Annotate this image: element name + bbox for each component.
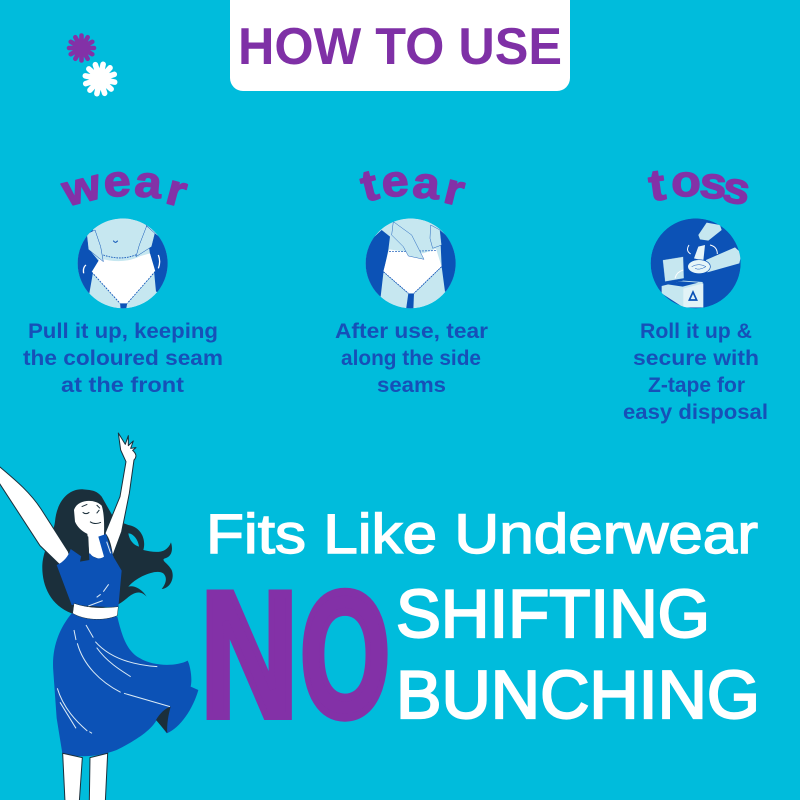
icon: tearing side seam — [366, 218, 456, 308]
text block: toss instructions: Roll it up & — [640, 320, 752, 343]
dress skirt — [53, 613, 198, 756]
face — [74, 501, 104, 537]
hair — [42, 489, 173, 613]
heading: wear — [56, 155, 192, 217]
headline: shifting: SHIFTING — [396, 576, 710, 652]
heading: toss: s — [719, 161, 754, 215]
text block: wear instructions: at the front — [61, 374, 184, 397]
heading: toss — [645, 156, 754, 215]
heading: wear: r — [161, 164, 192, 217]
neck and chest — [87, 533, 113, 560]
text block: tear instructions: After use, tear — [335, 320, 488, 343]
text block: wear instructions: the coloured seam — [23, 347, 223, 370]
icon: flowers — [69, 36, 118, 97]
headline: fits like underwear: Fits Like Underwear — [206, 502, 758, 565]
heading: tear: e — [380, 155, 410, 206]
panel: toss — [648, 170, 748, 308]
text block: toss instructions: Z-tape for — [648, 374, 745, 397]
legs — [63, 753, 108, 800]
headline: bunching: BUNCHING — [396, 657, 760, 733]
dress bodice — [57, 534, 122, 608]
headline: NO — [201, 554, 390, 754]
heading: tear: a — [411, 157, 443, 209]
title: HOW TO USE — [238, 18, 562, 76]
hair gap — [128, 533, 139, 547]
headline: NO: O — [300, 554, 390, 754]
illustration: dancing woman — [0, 433, 198, 800]
belt — [73, 603, 118, 619]
face features — [82, 504, 101, 524]
heading: wear: e — [102, 155, 132, 206]
skirt fold lines — [57, 542, 170, 733]
raised arm right — [105, 433, 136, 556]
text block: tear instructions: along the side — [341, 347, 481, 370]
panel: wear — [60, 172, 188, 308]
text block: toss instructions: secure with — [633, 347, 759, 370]
icon: roll and dispose — [651, 218, 742, 308]
text block: wear instructions — [23, 320, 223, 397]
heading: wear: w — [56, 158, 107, 216]
heading: toss: o — [671, 156, 701, 206]
heading: tear — [356, 155, 470, 216]
panel: tear — [359, 170, 466, 308]
heading: toss: s — [698, 157, 729, 209]
icon: white flower — [82, 61, 118, 97]
header panel — [230, 0, 570, 91]
heading: tear: t — [356, 159, 383, 211]
heading: wear: a — [133, 156, 165, 208]
text block: toss instructions — [623, 320, 768, 424]
hair front lock — [80, 533, 89, 562]
text block: wear instructions: Pull it up, keeping — [28, 320, 218, 343]
raised arm left — [0, 466, 69, 565]
text block: tear instructions — [335, 320, 488, 397]
skirt fold shadow — [156, 707, 171, 733]
headline: NO: N — [201, 556, 298, 754]
text block: toss instructions: easy disposal — [623, 401, 768, 424]
text block: tear instructions: seams — [377, 374, 446, 397]
icon: pulling up underwear — [78, 218, 168, 308]
icon: purple flower — [69, 36, 94, 60]
heading: tear: r — [440, 163, 470, 216]
heading: toss: t — [645, 159, 668, 211]
